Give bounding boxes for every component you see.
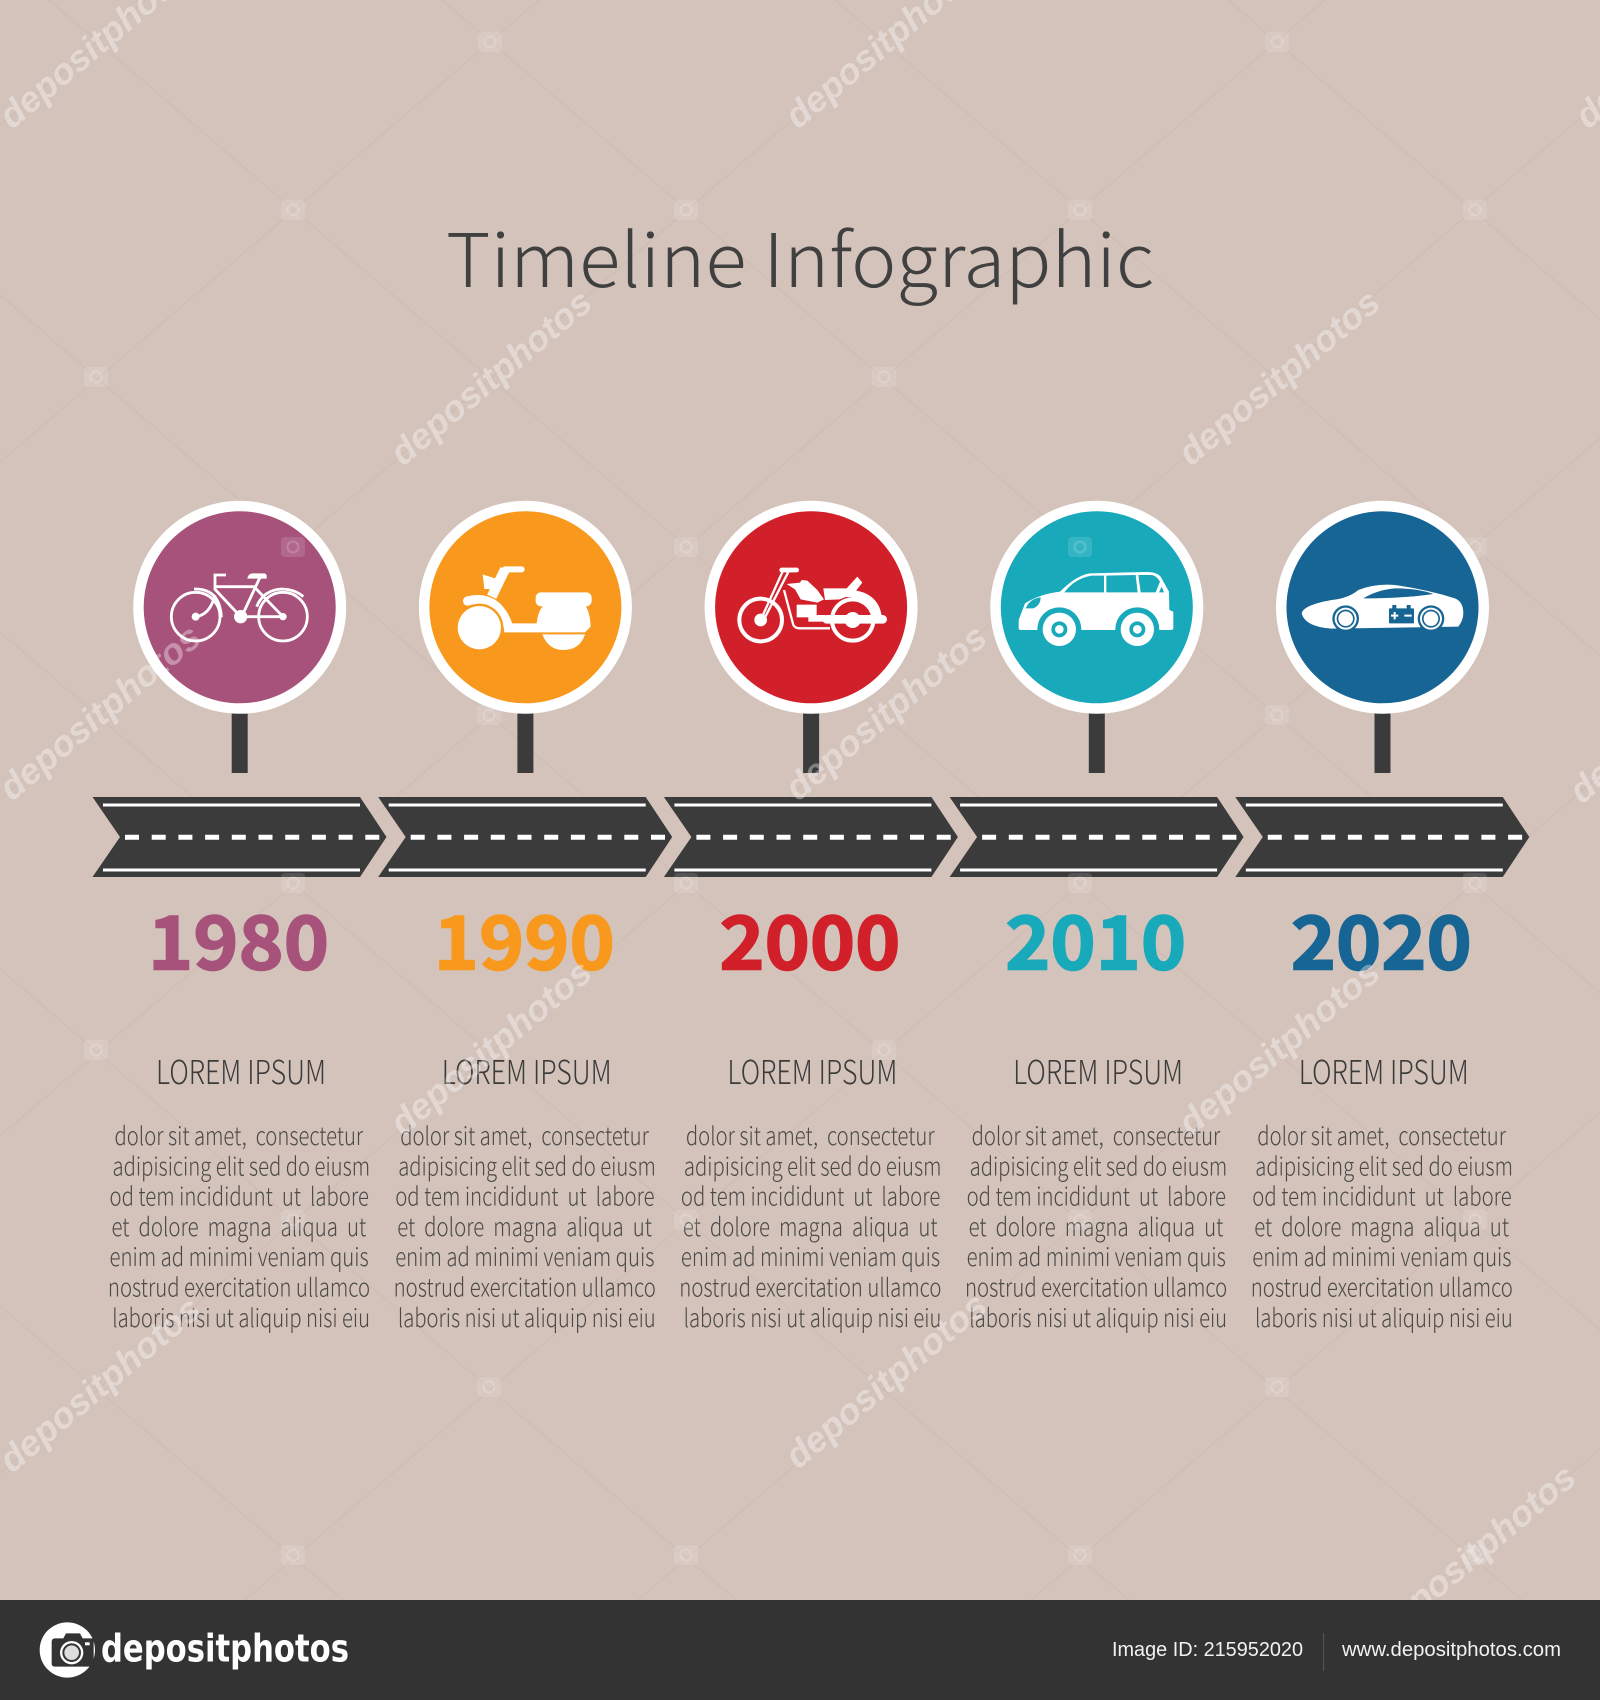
website: www.depositphotos.com (1341, 1639, 1561, 1661)
text block 2020: LOREM IPSUM (1299, 1046, 1469, 1094)
text block 1990: LOREM IPSUM (442, 1046, 612, 1094)
text block 2000: et dolore magna aliqua ut (683, 1208, 938, 1244)
watermark: diagonal depositphotos text: depositphotos (777, 616, 995, 808)
year 2020: 2020 (1291, 884, 1472, 992)
watermark: small camera marks (84, 32, 1487, 1565)
text block 2000: LOREM IPSUM (727, 1046, 897, 1094)
watermark: diagonal depositphotos text: depositphotos (1170, 951, 1388, 1143)
icon: battery (1389, 605, 1414, 623)
watermark: diagonal depositphotos text: depositphotos (1366, 1456, 1584, 1648)
text block 2010: LOREM IPSUM (1013, 1046, 1183, 1094)
road segment (378, 797, 672, 877)
text block 2020: enim ad minimi veniam quis (1252, 1238, 1512, 1274)
road segment (950, 797, 1244, 877)
image id: Image ID: 215952020 (1112, 1639, 1303, 1661)
text block 1990: nostrud exercitation ullamco (394, 1268, 656, 1304)
text block 1990: dolor sit amet, consectetur (400, 1117, 650, 1153)
watermark: diagonal depositphotos text: depositphotos (777, 1284, 995, 1476)
text block 2020: nostrud exercitation ullamco (1251, 1268, 1513, 1304)
text block 2010: nostrud exercitation ullamco (965, 1268, 1227, 1304)
timeline column: 1990 scooter (378, 501, 672, 1335)
text block 1980: laboris nisi ut aliquip nisi eiu (112, 1299, 370, 1335)
timeline column: 2020 electric car (1235, 501, 1529, 1335)
icon: motorcycle (739, 570, 883, 641)
text block 2010: enim ad minimi veniam quis (967, 1238, 1226, 1274)
sign: 1980 bicycle (133, 501, 346, 773)
year 1990: 1990 (434, 884, 615, 992)
sign: 2010 car (990, 501, 1203, 773)
sign: 1990 scooter (419, 501, 632, 773)
year 2010: 2010 (1005, 884, 1186, 992)
text block 2010 (965, 1046, 1227, 1335)
icon: scooter (455, 569, 592, 652)
timeline column: 1980 bicycle (92, 501, 386, 1335)
icon: camera logo (40, 1622, 95, 1678)
text block 1990: adipisicing elit sed do eiusm (398, 1147, 656, 1183)
year 1980: 1980 (148, 884, 329, 992)
sign: 2020 electric car (1276, 501, 1489, 773)
footer logo (40, 1622, 349, 1678)
text block 1980: adipisicing elit sed do eiusm (112, 1147, 370, 1183)
road segment (664, 797, 958, 877)
title: Timeline Infographic (446, 202, 1154, 309)
text block 2020: dolor sit amet, consectetur (1257, 1117, 1507, 1153)
footer bar (0, 1600, 1600, 1700)
text block 1990: et dolore magna aliqua ut (397, 1208, 652, 1244)
text block 1980: nostrud exercitation ullamco (108, 1268, 370, 1304)
text block 1980: et dolore magna aliqua ut (112, 1208, 366, 1244)
text block 1990: laboris nisi ut aliquip nisi eiu (398, 1299, 656, 1335)
road segment (92, 797, 386, 877)
text block 2000: enim ad minimi veniam quis (681, 1238, 940, 1274)
text block 2000: dolor sit amet, consectetur (686, 1117, 935, 1153)
text block 2000: od tem incididunt ut labore (681, 1178, 940, 1214)
text block 1980: dolor sit amet, consectetur (114, 1117, 364, 1153)
text block 2000: laboris nisi ut aliquip nisi eiu (684, 1299, 941, 1335)
text block 1980 (108, 1046, 370, 1335)
sign: 2000 motorcycle (705, 501, 918, 773)
text block 2010: et dolore magna aliqua ut (969, 1208, 1223, 1244)
text block 2010: laboris nisi ut aliquip nisi eiu (969, 1299, 1227, 1335)
text block 2000: nostrud exercitation ullamco (679, 1268, 942, 1304)
text block 2020: od tem incididunt ut labore (1252, 1178, 1512, 1214)
text block 1980: enim ad minimi veniam quis (110, 1238, 369, 1274)
text block 2020: laboris nisi ut aliquip nisi eiu (1255, 1299, 1513, 1335)
watermark: diagonal depositphotos text: depositphotos (382, 281, 600, 473)
year 2000: 2000 (719, 884, 900, 992)
watermark: diagonal depositphotos text: depositphotos (1170, 281, 1388, 473)
text block 2000 (679, 1046, 942, 1335)
icon: electric car (1302, 585, 1463, 632)
text block 2020: et dolore magna aliqua ut (1254, 1208, 1509, 1244)
watermark: diagonal depositphotos text: depositphotos (382, 951, 600, 1143)
road segment (1235, 797, 1529, 877)
text block 2010: adipisicing elit sed do eiusm (970, 1147, 1227, 1183)
text block 1990 (394, 1046, 656, 1335)
text block 2020 (1251, 1046, 1513, 1335)
text block 1980: LOREM IPSUM (156, 1046, 326, 1094)
icon: car (1019, 572, 1173, 651)
timeline column: 2000 motorcycle (664, 501, 958, 1335)
icon: bicycle (171, 573, 307, 641)
text block 1990: od tem incididunt ut labore (395, 1178, 655, 1214)
text block 2010: od tem incididunt ut labore (967, 1178, 1226, 1214)
timeline column: 2010 car (950, 501, 1244, 1335)
text block 2000: adipisicing elit sed do eiusm (684, 1147, 942, 1183)
text block 2020: adipisicing elit sed do eiusm (1255, 1147, 1513, 1183)
logo wordmark: depositphotos (101, 1627, 349, 1672)
text block 1980: od tem incididunt ut labore (110, 1178, 369, 1214)
text block 1990: enim ad minimi veniam quis (395, 1238, 654, 1274)
text block 2010: dolor sit amet, consectetur (972, 1117, 1221, 1153)
